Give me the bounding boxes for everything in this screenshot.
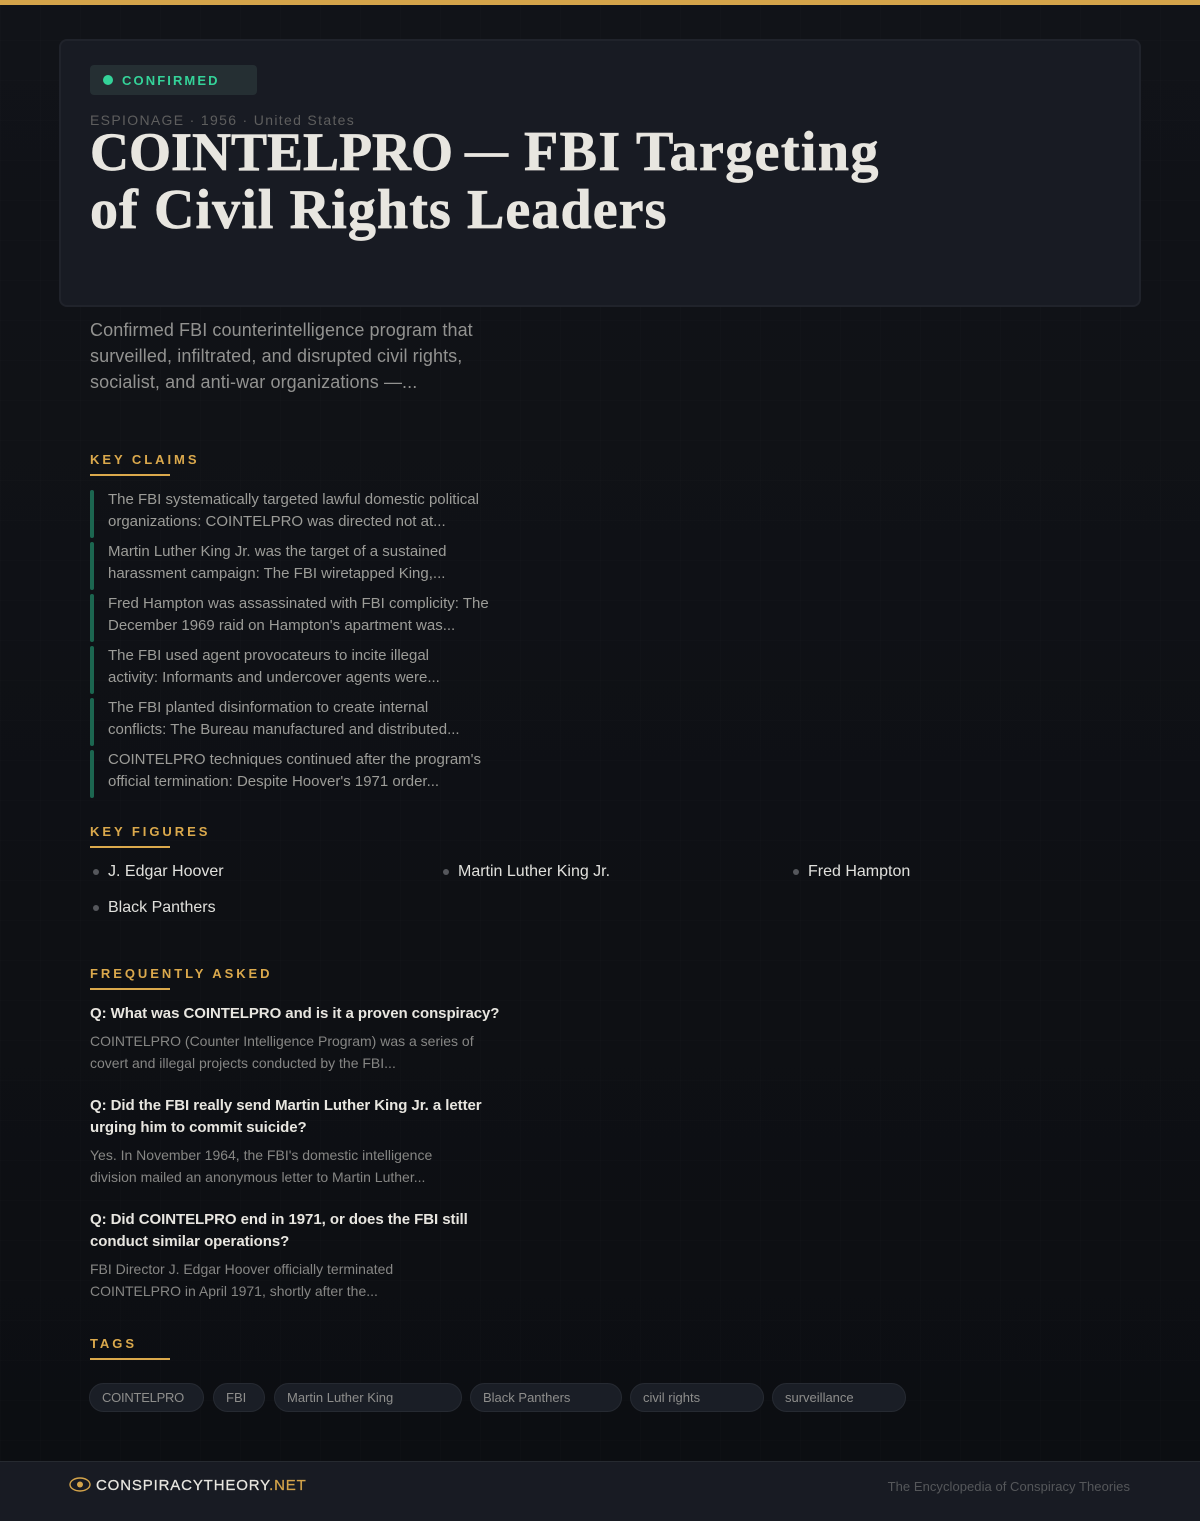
claim 6 bbox=[90, 750, 481, 798]
summary text bbox=[90, 320, 473, 392]
claim 1: The FBI systematically targeted lawful domestic political bbox=[108, 491, 479, 508]
top accent bar bbox=[0, 0, 1200, 5]
heading: key figures: KEY FIGURES bbox=[90, 824, 210, 839]
faq 2 answer bbox=[90, 1147, 432, 1185]
figure: King: Martin Luther King Jr. bbox=[458, 863, 610, 880]
faq 3 answer: COINTELPRO in April 1971, shortly after the... bbox=[90, 1283, 378, 1299]
faq 3 question bbox=[90, 1211, 468, 1250]
figure: Hampton: Fred Hampton bbox=[808, 863, 910, 880]
title: of Civil Rights Leaders bbox=[90, 179, 668, 241]
faq 2 question: Q: Did the FBI really send Martin Luther King Jr. a letter bbox=[90, 1097, 482, 1114]
claim 5: The FBI planted disinformation to create internal bbox=[108, 699, 428, 716]
heading: key claims: KEY CLAIMS bbox=[90, 452, 199, 467]
faq 1 answer: covert and illegal projects conducted by the FBI... bbox=[90, 1055, 396, 1071]
tag bbox=[213, 1383, 265, 1412]
summary text: socialist, and anti-war organizations —... bbox=[90, 372, 417, 392]
claim 3: Fred Hampton was assassinated with FBI complicity: The bbox=[108, 595, 489, 612]
faq 2 answer: division mailed an anonymous letter to Martin Luther... bbox=[90, 1169, 425, 1185]
claim 4: The FBI used agent provocateurs to incite illegal bbox=[108, 647, 429, 664]
faq 3 answer bbox=[90, 1261, 393, 1299]
claim 6: official termination: Despite Hoover's 1971 order... bbox=[108, 773, 439, 790]
badge dot bbox=[103, 75, 113, 85]
faq 3 question: conduct similar operations? bbox=[90, 1233, 289, 1250]
status badge bbox=[90, 65, 257, 95]
tag: Black Panthers bbox=[483, 1390, 570, 1405]
faq 3 answer: FBI Director J. Edgar Hoover officially terminated bbox=[90, 1261, 393, 1277]
tag: surveillance bbox=[785, 1390, 854, 1405]
title: — bbox=[465, 128, 508, 175]
claim 5 bbox=[90, 698, 460, 746]
summary text: surveilled, infiltrated, and disrupted civil rights, bbox=[90, 346, 462, 366]
faq 2 answer: Yes. In November 1964, the FBI's domestic intelligence bbox=[90, 1147, 432, 1163]
faq 2 question bbox=[90, 1097, 482, 1136]
site name: CONSPIRACYTHEORY.NET bbox=[96, 1477, 307, 1494]
badge label: CONFIRMED bbox=[122, 73, 220, 88]
faq 2 question: urging him to commit suicide? bbox=[90, 1119, 307, 1136]
title: COINTELPRO bbox=[90, 122, 453, 182]
claim 4: activity: Informants and undercover agents were... bbox=[108, 669, 440, 686]
heading: tags: TAGS bbox=[90, 1336, 137, 1351]
figure: Black Panthers: Black Panthers bbox=[108, 899, 216, 916]
claim 5: conflicts: The Bureau manufactured and distributed... bbox=[108, 721, 460, 738]
tagline: The Encyclopedia of Conspiracy Theories bbox=[888, 1479, 1130, 1494]
claim 6: COINTELPRO techniques continued after the program's bbox=[108, 751, 481, 768]
tag bbox=[89, 1383, 204, 1412]
panel: hero header bbox=[59, 39, 1141, 307]
claim 1: organizations: COINTELPRO was directed not at... bbox=[108, 513, 446, 530]
faq 1 answer bbox=[90, 1033, 474, 1071]
tag: FBI bbox=[226, 1390, 246, 1405]
figure: Hoover: J. Edgar Hoover bbox=[108, 863, 224, 880]
tag bbox=[630, 1383, 764, 1412]
category meta line: ESPIONAGE · 1956 · United States bbox=[90, 112, 355, 128]
claim 4 bbox=[90, 646, 440, 694]
claim 2 bbox=[90, 542, 447, 590]
title: FBI Targeting bbox=[524, 121, 880, 183]
claim 3 bbox=[90, 594, 489, 642]
tag: COINTELPRO bbox=[102, 1390, 184, 1405]
tag bbox=[274, 1383, 462, 1412]
tag: civil rights bbox=[643, 1390, 700, 1405]
claim 2: harassment campaign: The FBI wiretapped King,... bbox=[108, 565, 445, 582]
faq 1 answer: COINTELPRO (Counter Intelligence Program) was a series of bbox=[90, 1033, 474, 1049]
claim 3: December 1969 raid on Hampton's apartment was... bbox=[108, 617, 455, 634]
faq 3 question: Q: Did COINTELPRO end in 1971, or does the FBI still bbox=[90, 1211, 468, 1228]
claim 1 bbox=[90, 490, 479, 538]
tag bbox=[470, 1383, 622, 1412]
title bbox=[90, 121, 880, 241]
summary text: Confirmed FBI counterintelligence program that bbox=[90, 320, 473, 340]
claim 2: Martin Luther King Jr. was the target of a sustained bbox=[108, 543, 447, 560]
tag bbox=[772, 1383, 906, 1412]
tag: Martin Luther King bbox=[287, 1390, 393, 1405]
faq 1 question: Q: What was COINTELPRO and is it a proven conspiracy? bbox=[90, 1005, 499, 1022]
heading: frequently asked: FREQUENTLY ASKED bbox=[90, 966, 273, 981]
footer bbox=[0, 1461, 1200, 1521]
icon: eye logo bbox=[69, 1477, 91, 1492]
